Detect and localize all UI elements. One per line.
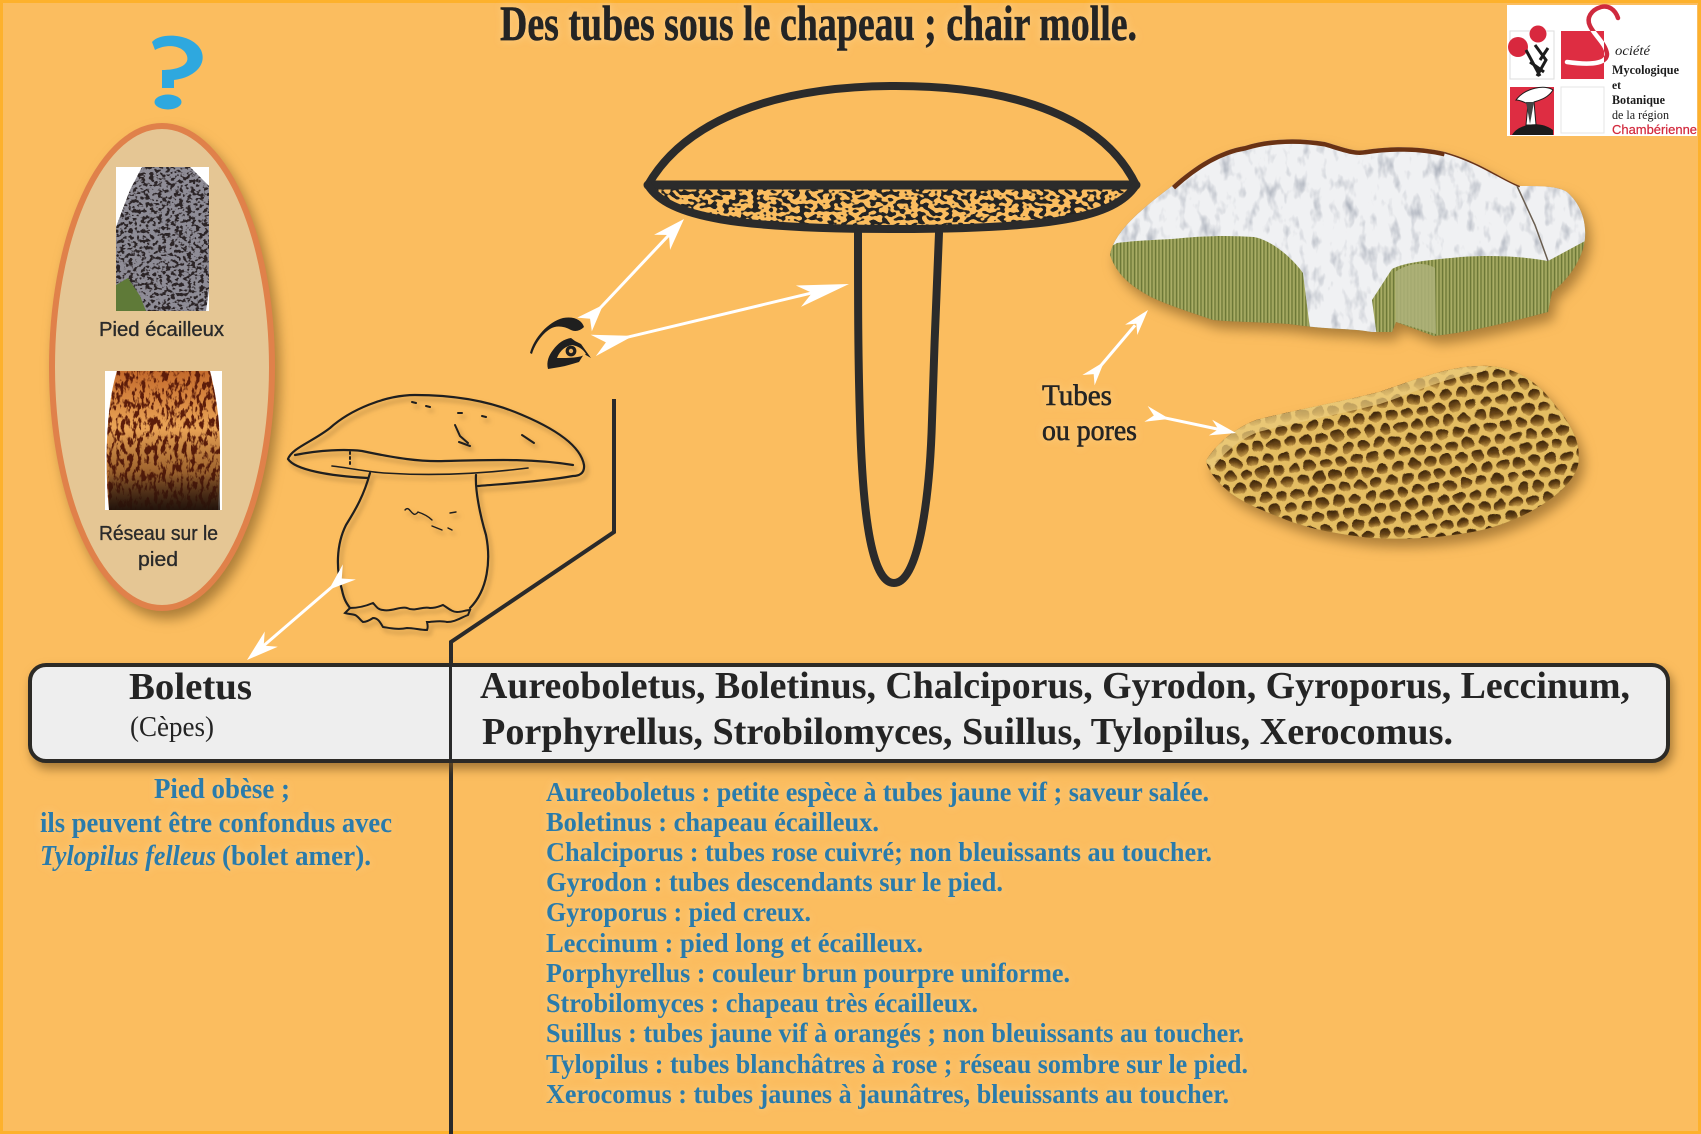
list: other genera descriptions: Boletinus : chapeau écailleux. bbox=[546, 807, 879, 837]
list: other genera descriptions: Leccinum : pied long et écailleux. bbox=[546, 928, 923, 958]
oval background bbox=[52, 126, 272, 608]
note: Boletus description bbox=[40, 774, 392, 872]
gills pore fill bbox=[656, 190, 1124, 225]
base bbox=[345, 603, 470, 630]
panel: stem types oval bbox=[52, 126, 272, 608]
logo text: ociété bbox=[1615, 44, 1651, 59]
photo: reticulated stem bbox=[105, 371, 222, 510]
caption: Pied écailleux: Pied écailleux bbox=[99, 319, 224, 341]
arrow: mushroom to Boletus bbox=[240, 564, 356, 668]
icon: eye bbox=[530, 317, 591, 369]
arrow: eye to tubes bbox=[577, 211, 692, 332]
cap and stem outline bbox=[648, 86, 1136, 583]
list: other genera descriptions: Gyroporus : pied creux. bbox=[546, 897, 811, 927]
cap outline bbox=[288, 395, 584, 486]
cap marks bbox=[412, 402, 534, 446]
icon: question mark bbox=[152, 36, 203, 109]
list: other genera descriptions: Chalciporus : tubes rose cuivré; non bleuissants au toucher. bbox=[546, 837, 1212, 867]
pale margin bbox=[1206, 366, 1489, 470]
logo mushroom box bbox=[1510, 87, 1554, 135]
logo: Société Mycologique et Botanique de la région Chambérienne bbox=[1507, 5, 1697, 137]
caption: Réseau sur le pied: Réseau sur le bbox=[99, 523, 218, 545]
caption: Réseau sur le pied: pied bbox=[138, 549, 178, 571]
photo: scaly stem bbox=[116, 167, 209, 311]
lighter tube zone bbox=[1395, 264, 1436, 334]
list: other genera descriptions: Xerocomus : tubes jaunes à jaunâtres, bleuissants au toucher. bbox=[546, 1079, 1229, 1109]
label: Tubes ou pores: Tubes bbox=[1042, 379, 1112, 412]
caption: Réseau sur le pied bbox=[99, 523, 218, 571]
logo text: Botanique bbox=[1612, 92, 1665, 107]
panel: genus names band bbox=[30, 663, 1668, 763]
photo shadow bbox=[1206, 366, 1579, 539]
list: other genera descriptions: Gyrodon : tubes descendants sur le pied. bbox=[546, 867, 1003, 897]
logo flower box bbox=[1508, 26, 1554, 79]
arrow: pores label to pores photo bbox=[1144, 406, 1238, 441]
logo text: Mycologique bbox=[1612, 62, 1679, 77]
list: other genera descriptions: Porphyrellus : couleur brun pourpre uniforme. bbox=[546, 958, 1070, 988]
mushroom section diagram bbox=[648, 86, 1138, 583]
logo text bbox=[1612, 44, 1697, 137]
other genera bbox=[480, 665, 1630, 753]
band divider bbox=[449, 663, 452, 763]
brown cap edge bbox=[1172, 139, 1445, 186]
photo: cut bolete with tubes bbox=[1105, 130, 1595, 345]
tube layer bbox=[1105, 230, 1595, 340]
common name: Cèpes: (Cèpes) bbox=[130, 711, 214, 743]
genus: Boletus: Boletus bbox=[129, 666, 252, 708]
logo letter S bbox=[1567, 6, 1618, 64]
arrow: eye to stem bbox=[591, 273, 852, 356]
list: other genera descriptions: Strobilomyces : chapeau très écailleux. bbox=[546, 988, 978, 1018]
logo text: de la région bbox=[1612, 107, 1669, 122]
other genera: Porphyrellus, Strobilomyces, Suillus, Tylopilus, Xerocomus. bbox=[482, 711, 1453, 753]
logo thin box bbox=[1561, 87, 1604, 133]
band background bbox=[30, 665, 1668, 761]
list: other genera descriptions: Tylopilus : tubes blanchâtres à rose ; réseau sombre sur le pied. bbox=[546, 1049, 1248, 1079]
mushroom line drawing bbox=[288, 395, 584, 630]
photo shadow bbox=[1110, 139, 1585, 336]
arrow: tubes label to tubes photo bbox=[1082, 305, 1154, 385]
label: Tubes ou pores: ou pores bbox=[1042, 414, 1137, 447]
logo text: et bbox=[1612, 78, 1621, 92]
black diagram divider line bbox=[451, 399, 614, 1134]
note: Boletus description: ils peuvent être confondus avec bbox=[40, 808, 392, 839]
logo red square bbox=[1561, 31, 1604, 79]
white flesh bbox=[1112, 139, 1586, 332]
list: other genera descriptions: Suillus : tubes jaune vif à orangés ; non bleuissants au toucher. bbox=[546, 1018, 1244, 1048]
cap rim bbox=[295, 450, 573, 465]
label: Tubes ou pores bbox=[1042, 379, 1137, 447]
list: other genera descriptions bbox=[546, 777, 1248, 1109]
note: Boletus description: Tylopilus felleus bbox=[40, 841, 216, 872]
list: other genera descriptions: Aureoboletus : petite espèce à tubes jaune vif ; saveur salée. bbox=[546, 777, 1209, 807]
photo: pores surface bbox=[1206, 366, 1591, 554]
note: Boletus description: Pied obèse ; bbox=[154, 774, 290, 805]
logo text: Chambérienne bbox=[1612, 123, 1697, 137]
flesh crack bbox=[1517, 186, 1548, 261]
stem bbox=[338, 473, 370, 608]
other genera: Aureoboletus, Boletinus, Chalciporus, Gyrodon, Gyroporus, Leccinum, bbox=[480, 665, 1630, 707]
note: Boletus description: (bolet amer). bbox=[222, 841, 371, 872]
logo background bbox=[1507, 5, 1697, 136]
